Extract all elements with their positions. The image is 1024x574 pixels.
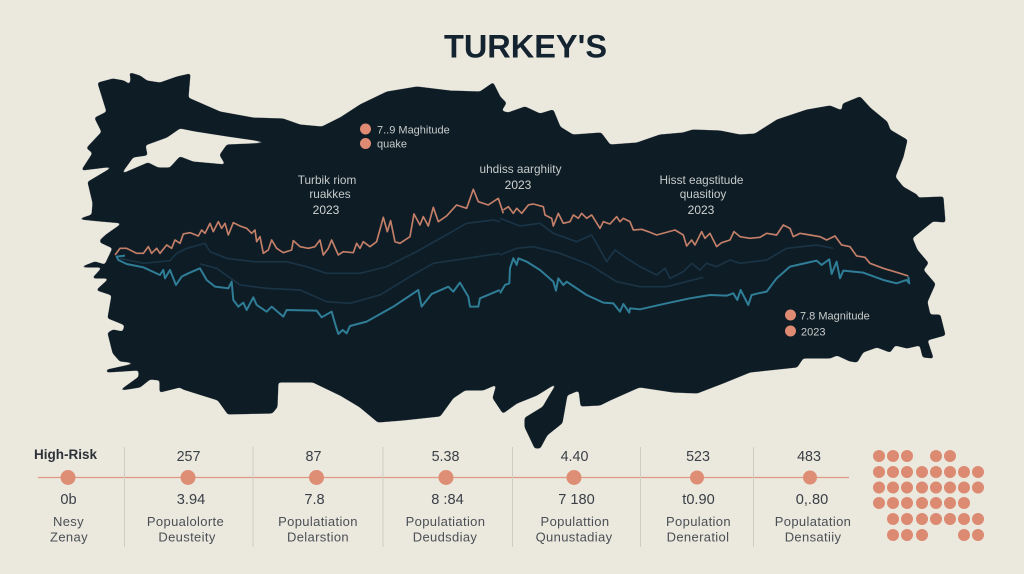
stat column: High-Risk: Nesy bbox=[53, 514, 84, 529]
stat column: 87: 7.8 bbox=[304, 492, 325, 508]
stat column: High-Risk: Zenay bbox=[50, 530, 88, 544]
callout: western label: Turbik riom bbox=[298, 173, 356, 187]
dark secondary line 2 bbox=[200, 247, 703, 303]
stat column: 523 bbox=[666, 449, 731, 544]
stat column: 5.38: 5.38 bbox=[432, 449, 459, 465]
callout: lower-right legend: 7.8 Magnitude bbox=[800, 310, 870, 322]
stat column: 4.40: 4.40 bbox=[561, 449, 588, 465]
callout: eastern label: quasitioy bbox=[680, 187, 726, 201]
callout: eastern label: Hisst eagstitude bbox=[660, 173, 744, 187]
stat column: 483: 0,.80 bbox=[796, 492, 828, 508]
callout: western label: 2023 bbox=[313, 203, 340, 217]
callout: central label bbox=[480, 162, 562, 192]
stat column: 257: Deusteity bbox=[158, 530, 216, 544]
stat column: 87 bbox=[278, 449, 358, 544]
callout: 7.8 magnitude quake: 7..9 Maghitude bbox=[377, 124, 450, 136]
stat column: 523: Population bbox=[666, 514, 731, 529]
stat column: High-Risk: High-Risk bbox=[34, 447, 97, 462]
callout: western label: ruakkes bbox=[309, 187, 351, 201]
callout: eastern label: 2023 bbox=[688, 203, 715, 217]
teal seismic line bbox=[117, 256, 909, 334]
title: TURKEY'S bbox=[444, 28, 607, 64]
stat column: 5.38: 8 :84 bbox=[431, 492, 464, 508]
stat column: 523: Deneratiol bbox=[667, 530, 729, 544]
callout: lower-right legend bbox=[785, 310, 870, 338]
stat column: 257: 257 bbox=[177, 449, 200, 465]
stat column: 5.38: Populatiation bbox=[406, 514, 485, 529]
stat column: 257: 3.94 bbox=[177, 492, 205, 508]
stat column: 87: Populatiation bbox=[278, 514, 358, 529]
stat column: 5.38 bbox=[406, 449, 485, 544]
timeline axis bbox=[38, 447, 849, 547]
stat column: 523: 523 bbox=[686, 449, 710, 465]
stat column: 523: t0.90 bbox=[682, 492, 715, 508]
stat column: High-Risk bbox=[34, 447, 97, 544]
stat column: High-Risk: 0b bbox=[60, 492, 77, 508]
callout: eastern label bbox=[660, 173, 744, 217]
stat column: 4.40 bbox=[536, 449, 613, 544]
callout: central label: 2023 bbox=[505, 178, 532, 192]
stat column: 4.40: Qunustadiay bbox=[536, 530, 613, 544]
map of Turkey bbox=[80, 73, 945, 448]
stat column: 483 bbox=[775, 449, 851, 544]
stat column: 87: Delarstion bbox=[287, 530, 349, 544]
stat column: 5.38: Deudsdiay bbox=[413, 530, 477, 544]
stat column: 4.40: Populattion bbox=[541, 514, 609, 529]
stat column: 483: Populatation bbox=[775, 514, 851, 529]
stat column: 87: 87 bbox=[306, 449, 321, 465]
stat column: 483: 483 bbox=[797, 449, 821, 465]
dark secondary line 1 bbox=[120, 218, 833, 278]
callout: 7.8 magnitude quake bbox=[360, 124, 450, 150]
stat column: 4.40: 7 180 bbox=[558, 492, 595, 508]
callout: 7.8 magnitude quake: quake bbox=[377, 138, 407, 150]
stat column: 257 bbox=[147, 449, 224, 544]
callout: lower-right legend: 2023 bbox=[801, 326, 825, 338]
dot matrix bbox=[873, 450, 984, 541]
stat column: 483: Densatiiy bbox=[785, 530, 841, 544]
callout: western label bbox=[298, 173, 356, 217]
callout: central label: uhdiss aarghiity bbox=[480, 162, 562, 176]
orange seismic line bbox=[115, 189, 908, 276]
stat column: 257: Popualolorte bbox=[147, 514, 224, 529]
